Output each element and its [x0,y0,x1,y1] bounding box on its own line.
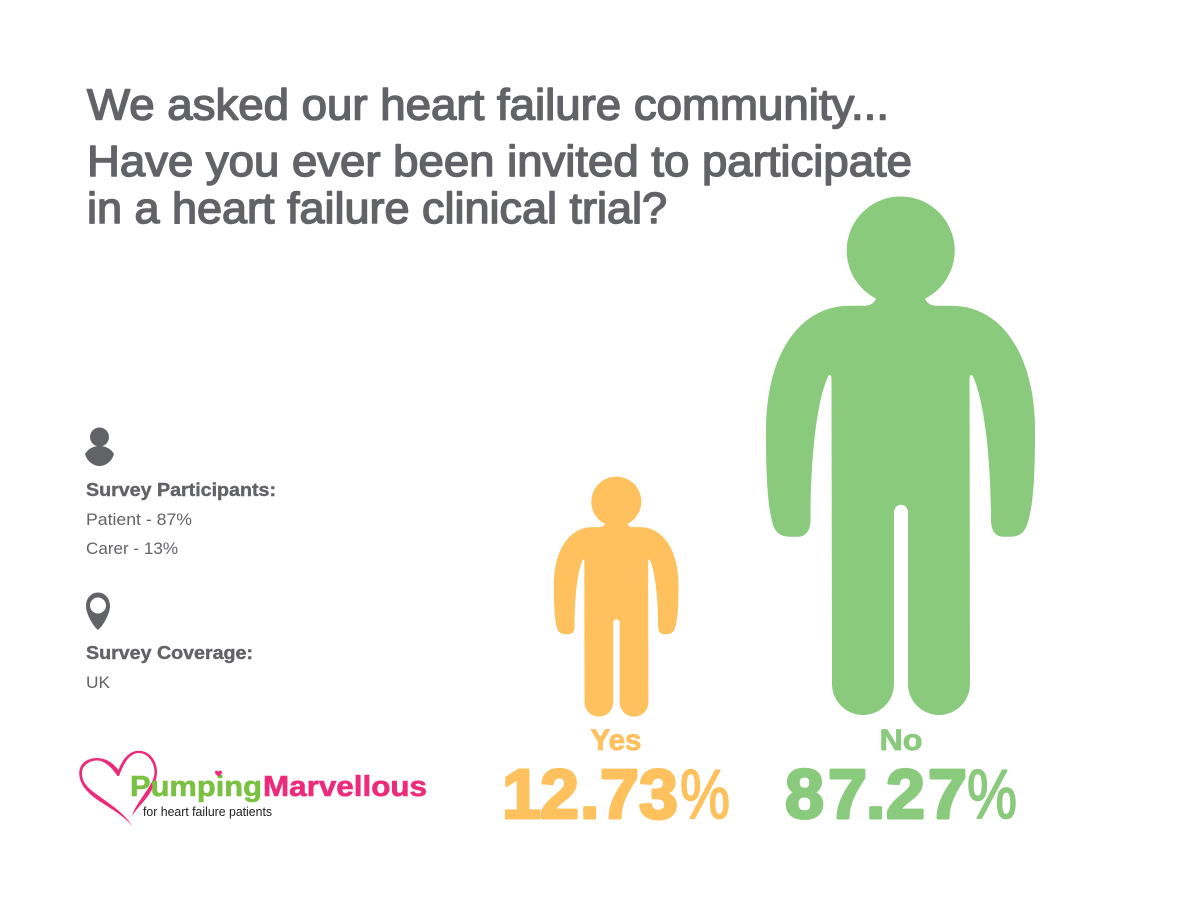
logo: Pumping Marvellous: Pumping [130,771,262,803]
icon: participant [85,428,114,466]
icon: heart outline [79,751,157,827]
panel: survey coverage [86,642,253,692]
value: yes percent: % [680,755,730,833]
panel: survey participants: Survey Participants: [86,479,276,500]
value: yes percent: 12.73 [502,755,678,833]
figure: no person [766,196,1035,715]
panel: survey coverage: UK [86,674,110,692]
figure: yes person [554,477,679,717]
panel: survey participants: Carer - 13% [86,540,178,558]
panel: survey participants: Patient - 87% [86,511,192,529]
panel: survey participants [86,479,276,558]
panel: survey coverage: Survey Coverage: [86,642,253,663]
value: no percent: % [967,755,1017,833]
logo: Pumping Marvellous [79,751,427,827]
icon: location pin [86,592,110,630]
logo: Pumping Marvellous: for heart failure patients [143,805,272,819]
icon: small heart [215,771,222,776]
value: no percent: 87.27 [785,755,967,833]
label: yes: Yes [590,724,642,757]
title: question heading: in a heart failure clinical trial? [87,184,667,233]
label: no: No [880,724,922,757]
title: question heading: We asked our heart failure community... [87,80,889,130]
title: question heading [87,80,912,233]
title: question heading: Have you ever been invited to participate [87,137,912,186]
logo: Pumping Marvellous: Marvellous [263,771,427,803]
